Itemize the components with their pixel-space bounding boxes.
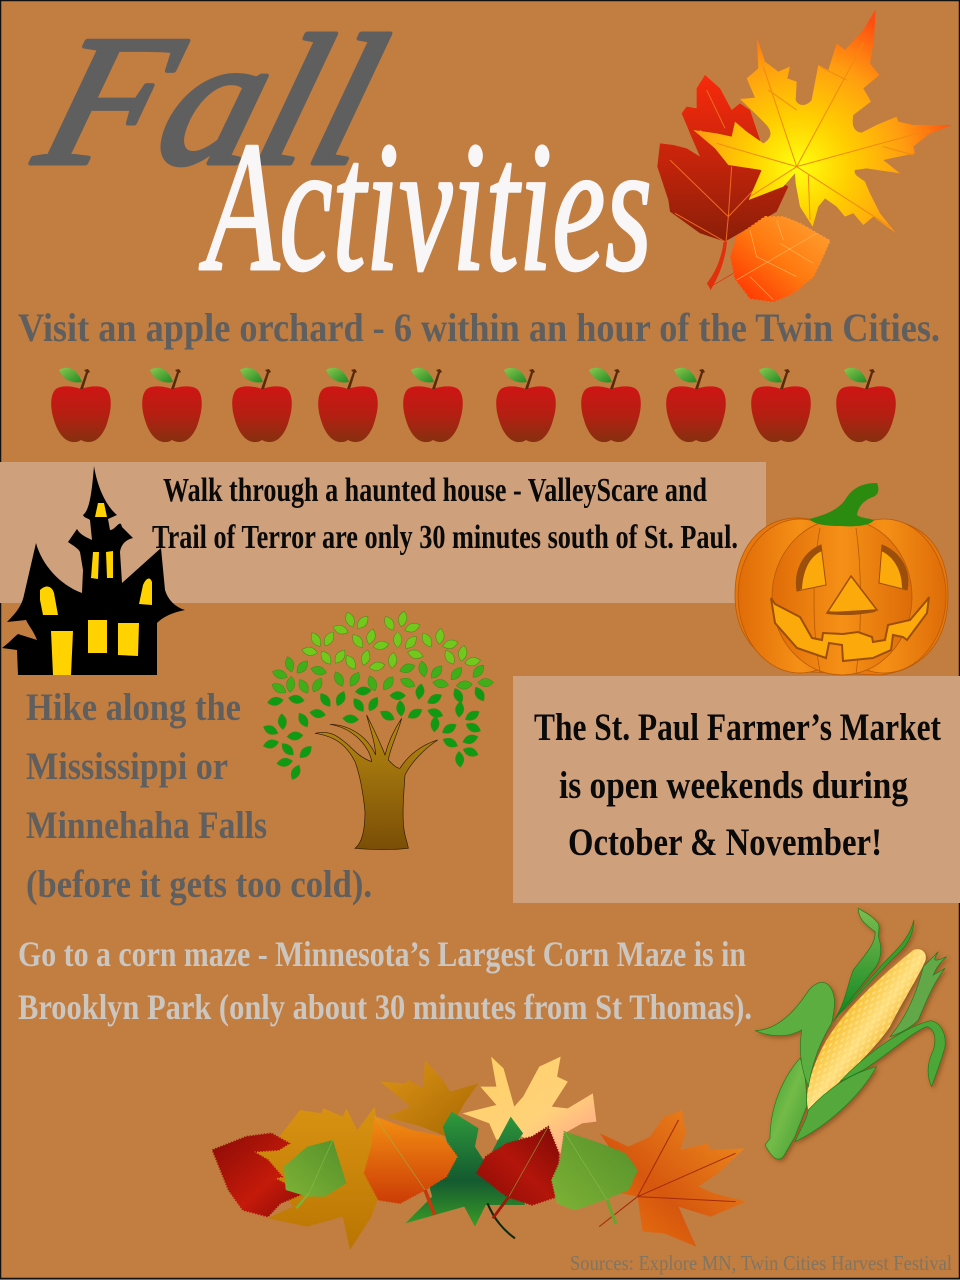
icon: corn [755,908,947,1159]
panel: haunted house [0,462,766,603]
orange leaf [731,217,830,302]
leaves: middle canopy [270,656,494,696]
text: farmers market: October & November! [568,821,882,864]
text: haunted house line 1: Walk through a haunted house - ValleyScare and [163,472,707,509]
red leaf stem [707,242,733,289]
icon: haunted house [2,466,185,675]
text: farmers market [534,706,941,864]
apples row [51,368,896,442]
icon: leaf pile [212,1057,746,1250]
text: hike: Hike along the [26,686,241,729]
text: hike: (before it gets too cold). [26,863,372,906]
red leaf [657,75,788,242]
icon: jack-o-lantern [735,483,948,675]
pumpkin stem [809,483,878,526]
text: hike [26,686,372,906]
icon: tree [262,610,494,850]
text: hike: Mississippi or [26,745,228,788]
text: corn maze: Go to a corn maze - Minnesota’s Largest Corn Maze is in [18,934,746,974]
pumpkin face [771,545,929,661]
panel: farmers market [513,676,960,903]
icon: autumn leaves cluster [657,9,953,302]
maple leaf [693,9,953,233]
title: Activities: Activities [199,104,652,310]
text: corn maze [18,934,752,1027]
text: corn maze: Brooklyn Park (only about 30 minutes from St Thomas). [18,987,752,1027]
leaves: lower canopy [262,683,487,781]
text: haunted house line 2: Trail of Terror are only 30 minutes south of St. Paul. [152,519,738,556]
text: hike: Minnehaha Falls [26,804,267,847]
text: farmers market: is open weekends during [559,764,908,807]
leaves: upper canopy [301,610,481,672]
title: Fall: Fall [18,0,404,204]
